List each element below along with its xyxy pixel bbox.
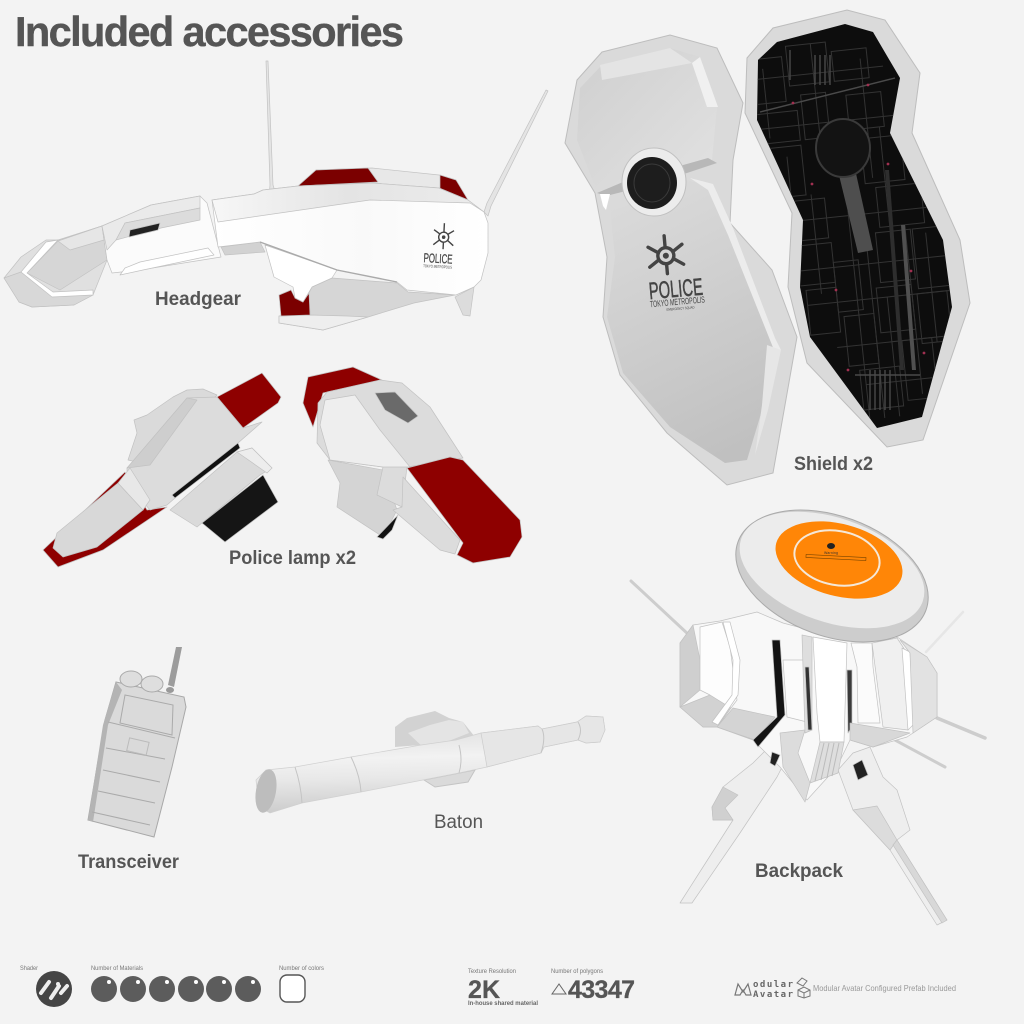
illustration: headgear bbox=[4, 61, 548, 330]
footer: number of materials: Number of Materials bbox=[91, 965, 144, 972]
illustration: police lamp right bbox=[303, 367, 522, 563]
police logo large bbox=[644, 233, 706, 313]
top disc: Warning bbox=[824, 551, 838, 555]
police logo small: POLICE bbox=[423, 250, 453, 267]
upper plate bbox=[577, 48, 717, 192]
footer: number of colors bbox=[279, 965, 325, 1002]
right leg bbox=[838, 747, 947, 925]
footer: shader bbox=[20, 965, 72, 1007]
lower plate bbox=[607, 180, 780, 463]
main band bbox=[212, 183, 488, 295]
label: transceiver: Transceiver bbox=[78, 852, 180, 873]
label: headgear: Headgear bbox=[155, 289, 242, 310]
footer: texture resolution: In-house shared material bbox=[468, 1000, 538, 1007]
footer: number of polygons: 43347 bbox=[568, 976, 635, 1004]
body bbox=[680, 612, 937, 802]
footer: number of colors: Number of colors bbox=[279, 965, 325, 972]
illustration: shield front bbox=[565, 35, 797, 485]
nose section bbox=[4, 226, 107, 307]
lower assembly bbox=[279, 278, 474, 330]
footer: modular avatar: Modular Avatar Configured Prefab Included bbox=[813, 983, 956, 993]
police logo large: TOKYO METROPOLIS bbox=[650, 294, 705, 309]
top disc bbox=[718, 485, 946, 667]
footer: number of polygons: Number of polygons bbox=[551, 968, 604, 975]
footer: modular avatar bbox=[735, 978, 956, 1000]
center ring bbox=[622, 148, 686, 216]
red dots bbox=[792, 84, 925, 371]
illustration: shield back bbox=[745, 10, 979, 447]
label: shield: Shield x2 bbox=[794, 454, 873, 475]
illustration: backpack bbox=[631, 485, 985, 925]
red top panel bbox=[298, 168, 468, 200]
footer: shader: Shader bbox=[20, 965, 39, 972]
police logo small: TOKYO METROPOLIS bbox=[423, 263, 452, 270]
footer: texture resolution bbox=[468, 968, 538, 1007]
illustration: police lamp left bbox=[43, 373, 281, 567]
footer: number of materials bbox=[91, 965, 261, 1002]
label: baton: Baton bbox=[434, 812, 483, 833]
police logo large: EMERGENCY SQUAD bbox=[666, 305, 695, 312]
white fin bbox=[265, 245, 337, 302]
illustration: baton bbox=[252, 711, 605, 814]
title: Included accessories bbox=[15, 8, 404, 55]
label: police lamp: Police lamp x2 bbox=[229, 548, 356, 569]
label: backpack: Backpack bbox=[755, 861, 843, 882]
footer: texture resolution: Texture Resolution bbox=[468, 968, 516, 975]
footer: number of polygons bbox=[551, 968, 635, 1004]
greeble panel bbox=[757, 42, 950, 419]
left leg bbox=[680, 743, 792, 903]
illustration: transceiver bbox=[88, 647, 186, 837]
connector details bbox=[770, 752, 868, 780]
footer: texture resolution: 2K bbox=[468, 976, 500, 1004]
antennas bbox=[631, 581, 985, 767]
antennas bbox=[266, 61, 548, 216]
police logo large: POLICE bbox=[648, 274, 704, 305]
back handle and disc bbox=[816, 119, 873, 253]
footer: modular avatar: Avatar bbox=[753, 990, 794, 1000]
police logo small bbox=[423, 222, 455, 270]
footer: modular avatar: odular bbox=[753, 980, 794, 990]
middle section with slot bbox=[102, 196, 265, 275]
